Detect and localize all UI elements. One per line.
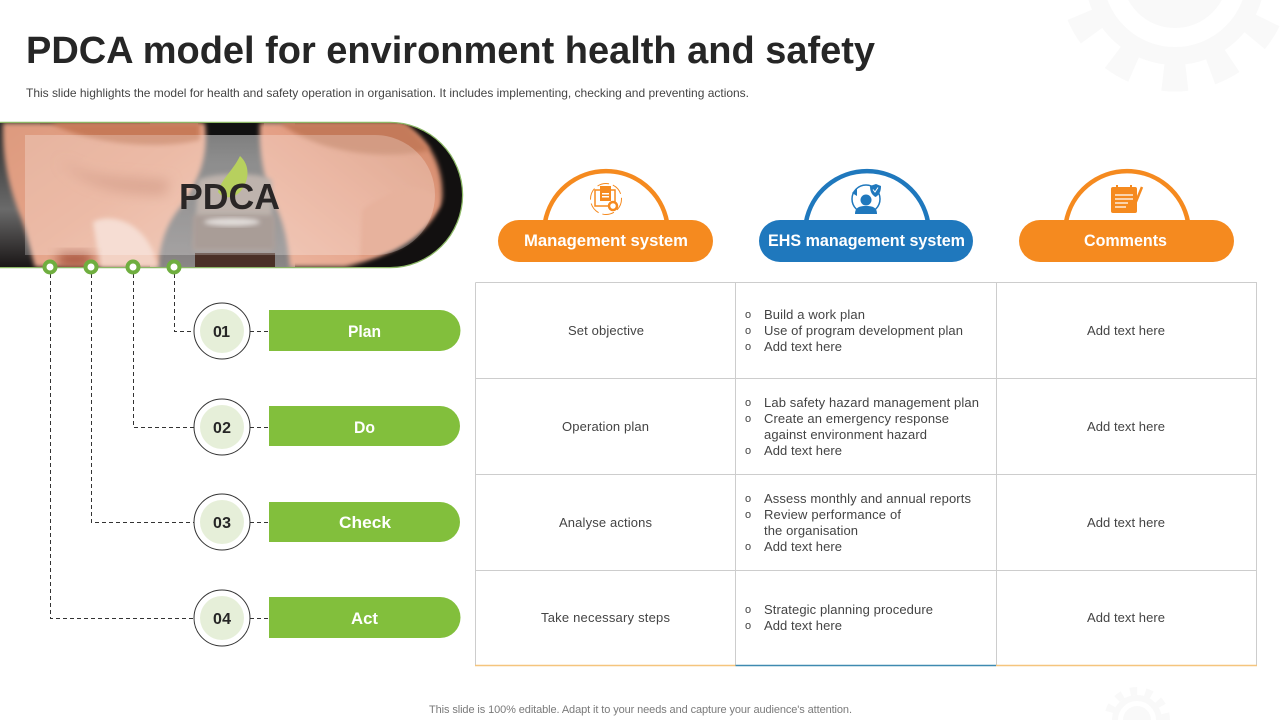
table row 4: Add text here [1087,610,1165,625]
table row 1: Add text here [1087,323,1165,338]
step 04 Act [194,590,460,646]
table row 3: Add text here [1087,515,1165,530]
step 01 Plan: Plan [348,322,381,341]
header: EHS management system [759,171,973,262]
photo banner: hands holding seedling jar [0,123,465,267]
right hand [260,123,442,267]
left hand [3,123,206,267]
header: Management system [498,171,713,262]
table row 1: o [745,325,751,337]
table row 1: Add text here [764,339,842,354]
table row 1: o [745,309,751,321]
table row 4: o [745,604,751,616]
table row 2: Create an emergency response [764,411,949,426]
table row 3: the organisation [764,523,858,538]
table row 2: Lab safety hazard management plan [764,395,979,410]
step 03 Check [194,494,460,550]
step 03 Check: 03 [213,515,231,532]
table row 3: Review performance of [764,507,901,522]
table row 2: Add text here [1087,419,1165,434]
icon: notepad with pen [1111,185,1142,213]
table row 2: o [745,397,751,409]
table row 1 [568,307,1165,354]
translucent overlay [25,135,435,255]
table row 2 [562,395,1165,458]
connector dots [44,262,180,272]
table row 4: o [745,620,751,632]
step 04 Act: Act [351,609,378,628]
table row 3: o [745,509,751,521]
step 03 Check: Check [339,513,392,532]
header: EHS management system: EHS management system [768,231,965,250]
table row 2: against environment hazard [764,427,927,442]
table row 1: Use of program development plan [764,323,963,338]
header: Comments [1019,171,1234,262]
table row 1: o [745,341,751,353]
table row 4: Strategic planning procedure [764,602,933,617]
title: PDCA model for environment health and safety [26,30,875,72]
table row 4 [541,602,1165,633]
step 02 Do: Do [354,418,375,437]
step 04 Act: 04 [213,611,231,628]
table row 3: o [745,541,751,553]
table row 3: Analyse actions [559,515,652,530]
step 02 Do [194,399,460,455]
table row 2: o [745,445,751,457]
table row 3: o [745,493,751,505]
icon: person with shield [852,184,881,214]
table row 3: Assess monthly and annual reports [764,491,972,506]
watermark: gear top right [1061,0,1280,89]
table row 3: Add text here [764,539,842,554]
header: Comments: Comments [1084,231,1167,250]
table row 2: Add text here [764,443,842,458]
table row 1: Build a work plan [764,307,865,322]
table row 2: o [745,413,751,425]
table row 4: Add text here [764,618,842,633]
jar [194,172,274,217]
leaf [218,156,248,197]
connector: dashed lines from banner to rows [50,274,269,618]
icon: monitor with gear [590,184,622,214]
watermark: gear bottom right [1102,685,1172,720]
step 01 Plan: 01 [213,324,230,341]
table row 1: Set objective [568,323,644,338]
step 01 Plan [194,303,460,359]
table row 3 [559,491,1165,554]
step 02 Do: 02 [213,420,231,437]
header: Management system: Management system [524,231,688,250]
footer note: This slide is 100% editable. Adapt it to your needs and capture your audience's attention. [429,704,852,716]
subtitle: This slide highlights the model for health and safety operation in organisation. It includes implementing, checking and preventing actions. [26,86,749,100]
table [475,282,1257,666]
table row 4: Take necessary steps [541,610,670,625]
table row 2: Operation plan [562,419,649,434]
banner label: PDCA [179,176,280,217]
